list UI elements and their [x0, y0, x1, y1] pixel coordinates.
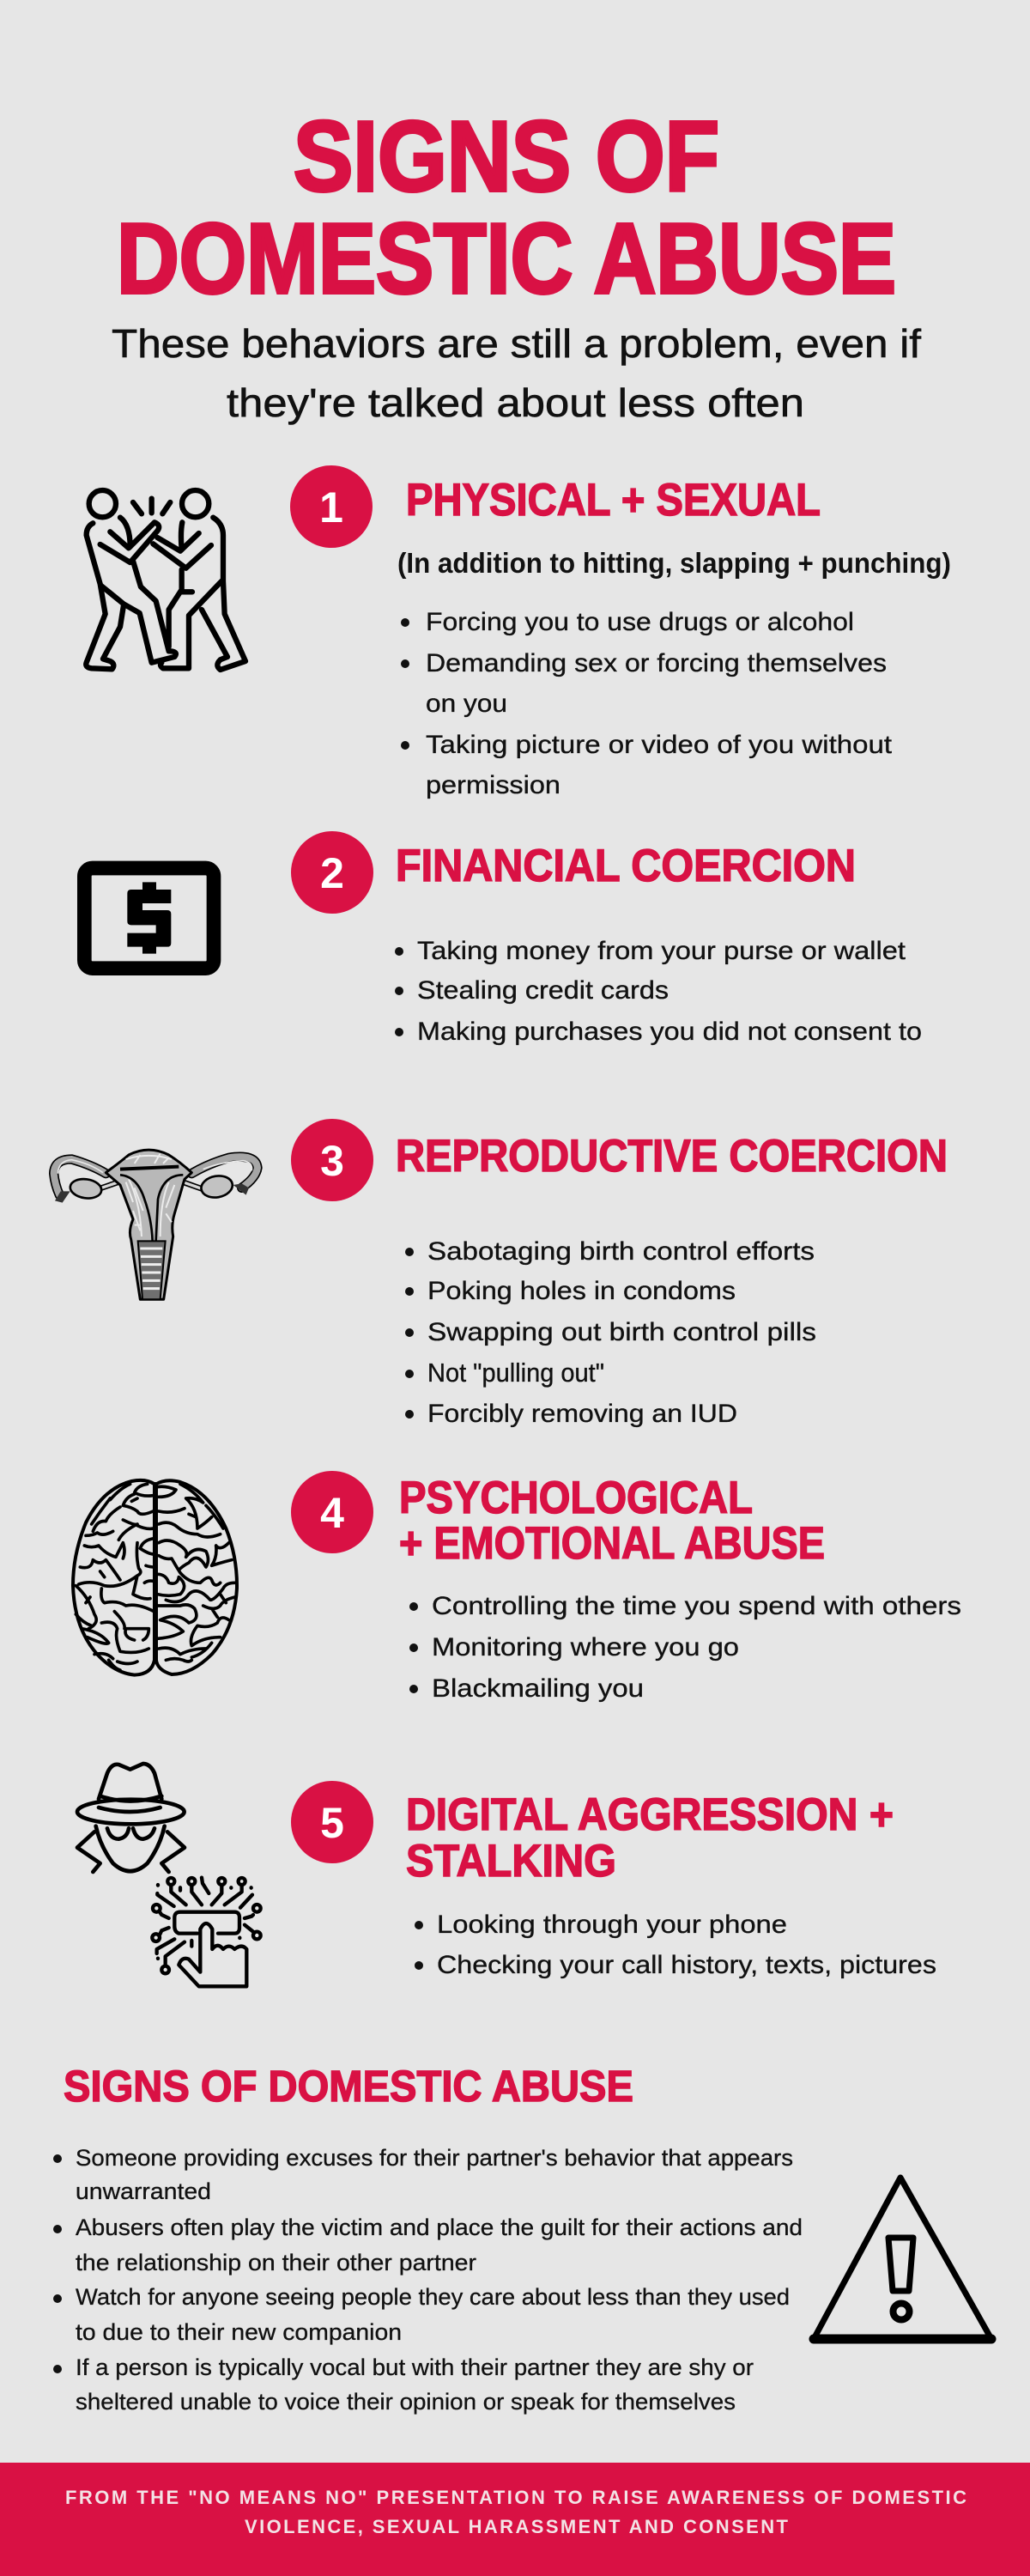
bullet list — [395, 937, 922, 1046]
bullet list: to due to their new companion — [76, 2319, 402, 2345]
number badge 1: 1 — [319, 483, 343, 532]
bullet list — [401, 608, 893, 799]
subtitle — [112, 321, 921, 425]
bullet list — [409, 1592, 961, 1703]
heading: PSYCHOLOGICAL — [399, 1473, 753, 1523]
number badge 5 — [291, 1781, 373, 1863]
footer banner: FROM THE "NO MEANS NO" PRESENTATION TO RAISE AWARENESS OF DOMESTIC — [65, 2487, 966, 2508]
bullet list — [415, 1911, 936, 1979]
bullet list — [405, 1237, 816, 1428]
heading — [399, 1473, 825, 1569]
number badge 5: 5 — [320, 1799, 344, 1847]
heading: SIGNS OF DOMESTIC ABUSE — [64, 2062, 633, 2111]
bullet list: Poking holes in condoms — [427, 1277, 736, 1305]
bullet list: Monitoring where you go — [432, 1633, 739, 1662]
icon: spy with hat — [77, 1764, 185, 1872]
icon: uterus — [54, 1150, 258, 1299]
icon: finger touching circuit button — [152, 1878, 261, 1986]
heading: FINANCIAL COERCION — [396, 841, 856, 891]
bullet list: Forcibly removing an IUD — [427, 1400, 737, 1428]
panel: reproductive coercion — [54, 1119, 948, 1428]
panel: psychological + emotional abuse — [73, 1471, 961, 1703]
bullet list: Sabotaging birth control efforts — [427, 1237, 815, 1266]
bullet list: Abusers often play the victim and place the guilt for their actions and — [76, 2215, 803, 2240]
bullet list: If a person is typically vocal but with their partner they are shy or — [76, 2354, 754, 2380]
heading: PHYSICAL + SEXUAL — [406, 475, 821, 526]
bullet list: Forcing you to use drugs or alcohol — [426, 608, 854, 636]
heading: STALKING — [406, 1836, 616, 1886]
title: SIGNS OF — [294, 100, 719, 212]
number badge 3 — [291, 1119, 373, 1201]
icon: warning triangle — [814, 2178, 991, 2339]
bullet list: permission — [426, 771, 560, 799]
title: DOMESTIC ABUSE — [117, 203, 896, 314]
number badge 4 — [291, 1471, 373, 1553]
bullet list: on you — [426, 690, 507, 718]
panel: physical + sexual — [86, 465, 951, 799]
heading — [406, 1789, 894, 1886]
subheading: (In addition to hitting, slapping + punching) — [397, 547, 951, 579]
bullet list: sheltered unable to voice their opinion or speak for themselves — [76, 2389, 736, 2415]
panel: digital aggression + stalking — [77, 1764, 936, 1986]
heading: DIGITAL AGGRESSION + — [406, 1789, 894, 1840]
subtitle: These behaviors are still a problem, even if — [112, 321, 921, 366]
footer banner: VIOLENCE, SEXUAL HARASSMENT AND CONSENT — [245, 2516, 789, 2537]
icon: dollar bill — [84, 868, 214, 969]
bullet list: Taking money from your purse or wallet — [417, 937, 906, 965]
bullet list: unwarranted — [76, 2178, 211, 2204]
number badge 1 — [290, 465, 373, 548]
bullet list: Not "pulling out" — [427, 1358, 604, 1388]
footer banner — [0, 2463, 1030, 2576]
number badge 2 — [291, 831, 373, 914]
title — [117, 100, 896, 314]
bullet list: Swapping out birth control pills — [427, 1318, 816, 1346]
bullet list: Making purchases you did not consent to — [417, 1018, 922, 1046]
bullet list: Blackmailing you — [432, 1674, 644, 1703]
bullet list: Controlling the time you spend with others — [432, 1592, 961, 1620]
bullet list: Checking your call history, texts, pictures — [437, 1951, 936, 1979]
bullet list: Watch for anyone seeing people they care about less than they used — [76, 2284, 790, 2310]
bullet list: Someone providing excuses for their partner's behavior that appears — [76, 2145, 793, 2171]
panel: signs of domestic abuse — [53, 2062, 991, 2415]
number badge 4: 4 — [320, 1489, 344, 1537]
subtitle: they're talked about less often — [227, 380, 804, 425]
bullet list: Taking picture or video of you without — [426, 731, 893, 759]
bullet list — [53, 2145, 803, 2415]
bullet list: the relationship on their other partner — [76, 2250, 476, 2275]
icon: brain — [73, 1480, 237, 1675]
panel: financial coercion — [84, 831, 922, 1046]
heading: + EMOTIONAL ABUSE — [399, 1518, 825, 1569]
number badge 3: 3 — [320, 1137, 344, 1185]
icon: two people fighting — [86, 490, 245, 670]
bullet list: Demanding sex or forcing themselves — [426, 649, 887, 677]
bullet list: Looking through your phone — [437, 1911, 787, 1939]
heading: REPRODUCTIVE COERCION — [396, 1131, 948, 1182]
number badge 2: 2 — [320, 849, 344, 897]
bullet list: Stealing credit cards — [417, 976, 669, 1005]
